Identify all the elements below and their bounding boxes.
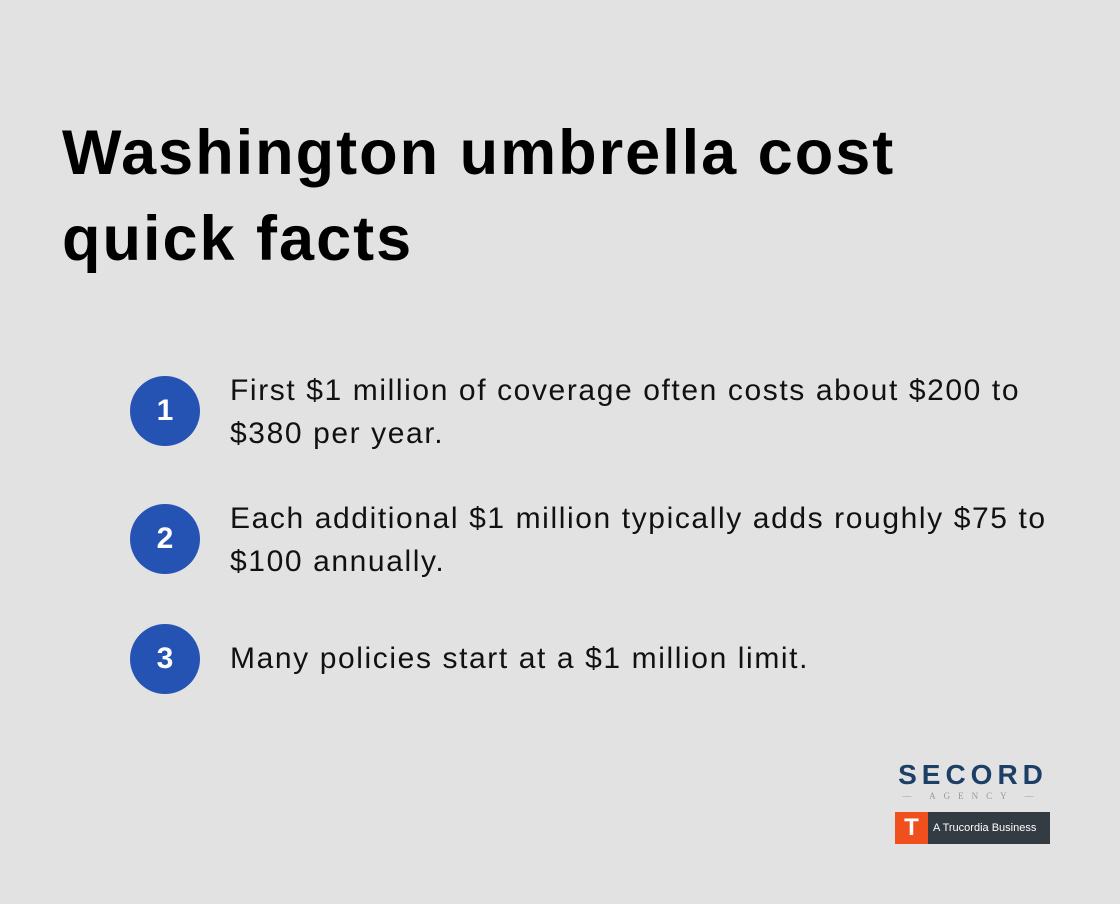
trucordia badge: A Trucordia Business xyxy=(933,822,1036,834)
title: quick facts xyxy=(62,204,413,274)
text 1 xyxy=(230,374,1020,450)
text 2 xyxy=(230,502,1047,578)
title xyxy=(62,118,895,274)
number 3 xyxy=(130,624,200,694)
text 1: First $1 million of coverage often costs about $200 to xyxy=(230,374,1020,407)
text 2: Each additional $1 million typically adds roughly $75 to xyxy=(230,502,1047,535)
item 2 xyxy=(130,502,1047,578)
logo wordmark: SECORD xyxy=(898,759,1048,790)
text 3: Many policies start at a $1 million limit. xyxy=(230,642,809,675)
text 1: $380 per year. xyxy=(230,417,444,450)
number 1 xyxy=(130,376,200,446)
title: Washington umbrella cost xyxy=(62,118,895,188)
logo xyxy=(895,759,1050,844)
number 2: 2 xyxy=(157,522,173,555)
logo subtitle: — AGENCY — xyxy=(902,791,1042,801)
number 1: 1 xyxy=(157,394,173,427)
trucordia badge xyxy=(895,812,1050,844)
number 3: 3 xyxy=(157,642,173,675)
text 2: $100 annually. xyxy=(230,545,445,578)
trucordia badge: T xyxy=(904,814,919,841)
number 2 xyxy=(130,504,200,574)
item 1 xyxy=(130,374,1020,450)
item 3 xyxy=(130,624,809,694)
